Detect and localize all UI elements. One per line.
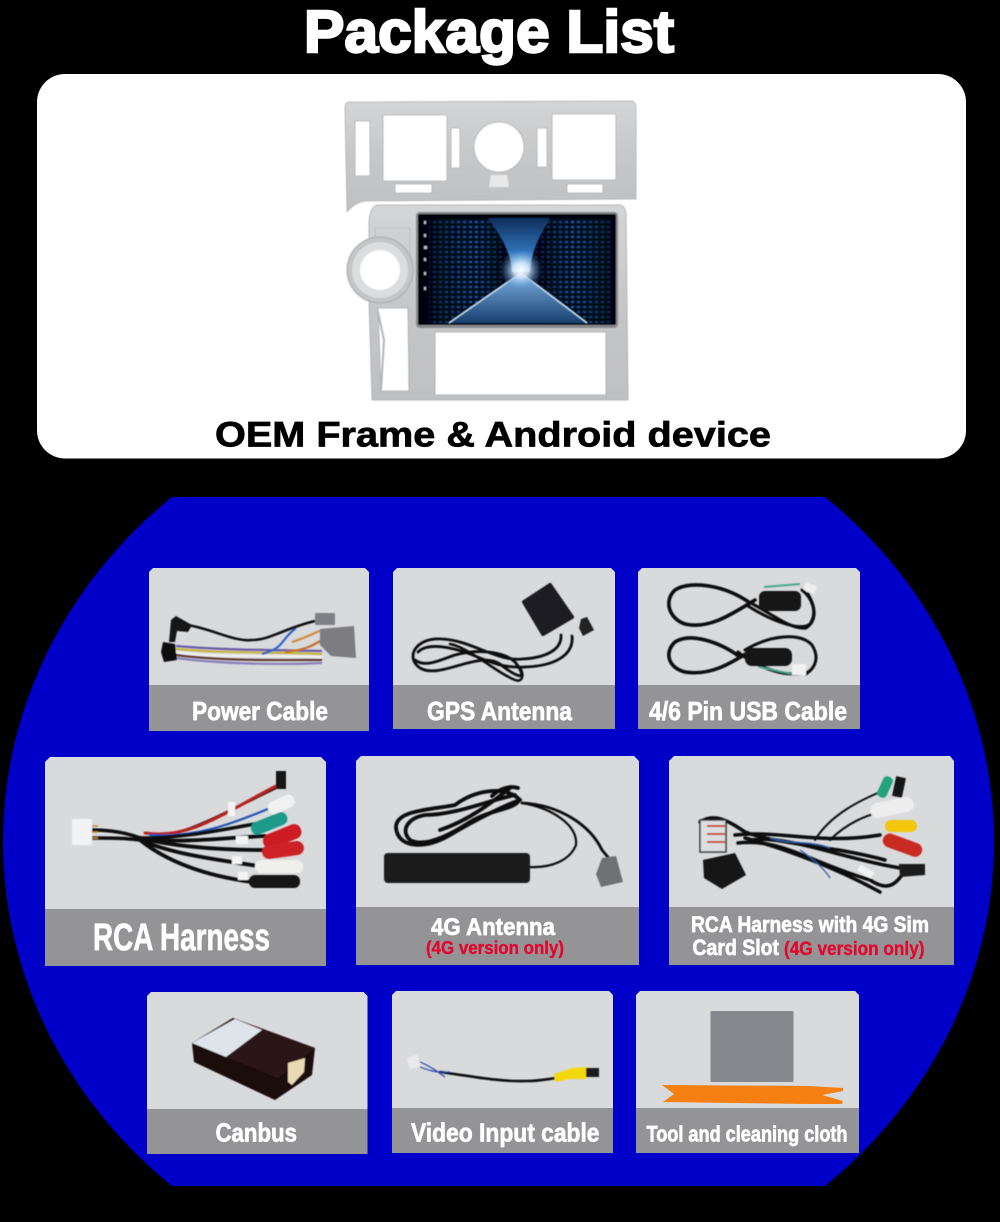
illustration: lower silver frame [369, 205, 628, 400]
icon: cleaning cloth [710, 1011, 794, 1082]
card: Tool and cleaning cloth [636, 991, 859, 1153]
label: 4G Antenna [431, 914, 556, 941]
label: (4G version only) [426, 938, 564, 958]
illustration: knob ring [347, 237, 413, 303]
card: Canbus [147, 992, 368, 1154]
label: Power Cable [192, 696, 328, 726]
label: GPS Antenna [427, 696, 572, 726]
label: Tool and cleaning cloth [646, 1122, 848, 1146]
icon: RCA harness [72, 771, 305, 888]
card: RCA Harness with 4G Sim Card Slot [669, 756, 954, 965]
label [426, 914, 564, 958]
panel: OEM frame and Android device [37, 74, 966, 458]
label: 4/6 Pin USB Cable [649, 696, 847, 726]
icon: video input cable [407, 1055, 599, 1082]
title: Package List [304, 0, 674, 65]
label: (4G version only) [784, 939, 924, 960]
icon: RCA harness with SIM [700, 775, 925, 892]
label: Video Input cable [411, 1118, 600, 1148]
illustration: upper silver trim frame [345, 101, 636, 212]
card: RCA Harness [45, 757, 326, 966]
icon: orange pry tool [662, 1085, 843, 1104]
icon: power cable harness [161, 613, 356, 664]
caption: OEM Frame & Android device [215, 416, 771, 454]
icon: GPS antenna [413, 585, 594, 681]
card: Power Cable [149, 568, 369, 731]
card: GPS Antenna [393, 568, 615, 729]
card: Video Input cable [392, 991, 613, 1153]
icon: 4G antenna [384, 787, 623, 887]
card: 4G Antenna [356, 756, 639, 965]
panel: accessories blue shape [3, 497, 994, 1186]
icon: USB cables [669, 582, 817, 675]
label: Card Slot [692, 935, 780, 960]
label: RCA Harness with 4G Sim [691, 912, 929, 937]
icon: Canbus box [192, 1018, 315, 1100]
label: Canbus [216, 1118, 297, 1148]
label: RCA Harness [93, 917, 270, 959]
label [691, 912, 929, 960]
card: 4/6 Pin USB Cable [638, 568, 860, 729]
illustration: Android touch screen [416, 212, 618, 328]
